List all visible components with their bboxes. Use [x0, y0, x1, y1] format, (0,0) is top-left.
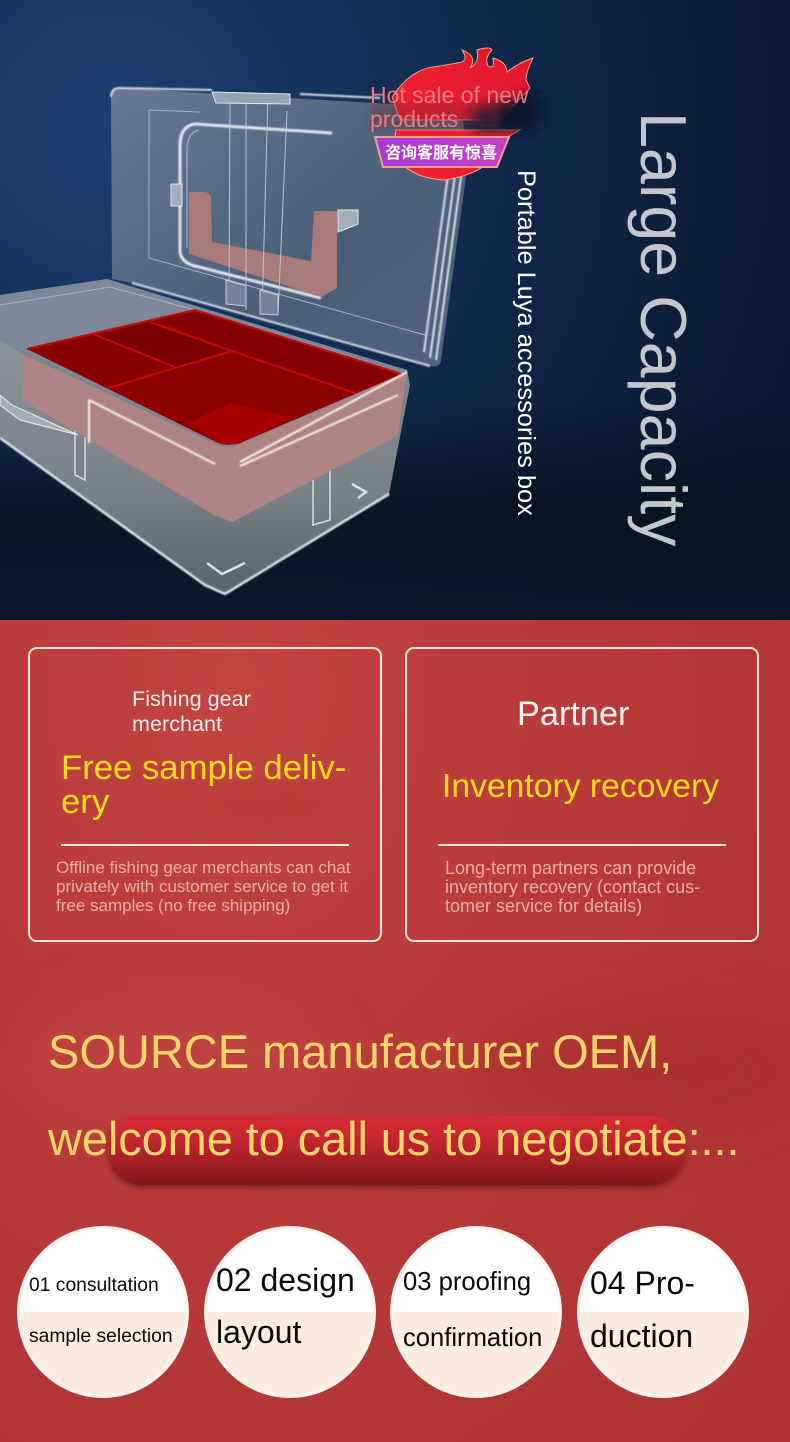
step 02 [204, 1226, 376, 1398]
product illustration: transparent box with red tray [0, 0, 790, 596]
step 04 detail: duction [590, 1318, 693, 1354]
card description [56, 858, 351, 915]
card offer: Inventory recovery [442, 767, 719, 805]
panel: red background [0, 620, 790, 1442]
card offer: ery [61, 783, 109, 821]
step 01 detail: sample selection [29, 1326, 173, 1347]
card heading: Fishing gear [132, 686, 251, 711]
step 01 label: 01 consultation [29, 1275, 159, 1296]
pink band [23, 354, 407, 522]
OEM heading [48, 1025, 739, 1165]
OEM heading: SOURCE manufacturer OEM, [48, 1025, 672, 1078]
step 04 label: 04 Pro- [590, 1265, 695, 1301]
card offer [61, 749, 346, 821]
card rule [438, 844, 726, 846]
card offer: Free sample deliv- [61, 749, 346, 787]
card description: free samples (no free shipping) [56, 896, 290, 915]
decorative pill behind heading [108, 1116, 685, 1185]
panel: product hero [0, 0, 790, 620]
red textured glow [524, 1044, 622, 1088]
hot sale badge [370, 48, 540, 180]
red tray [27, 310, 402, 445]
step 02 label: 02 design [216, 1262, 355, 1298]
panel: fishing gear merchant card [28, 647, 382, 942]
card heading: Partner [517, 695, 629, 733]
step 03 [390, 1226, 562, 1398]
step 04 [577, 1226, 749, 1398]
card description: Long-term partners can provide [445, 858, 696, 878]
card rule [61, 844, 349, 846]
card description [445, 858, 700, 916]
panel: partner card [405, 647, 759, 942]
step 02 detail: layout [216, 1314, 301, 1350]
vertical divider [575, 155, 577, 545]
vertical subtitle: Portable Luya accessories box [512, 170, 540, 516]
card description: inventory recovery (contact cus- [445, 877, 700, 897]
vertical title: Large Capacity [627, 112, 699, 546]
badge label: 咨询客服有惊喜 [385, 145, 497, 162]
card heading [132, 686, 251, 736]
card heading: merchant [132, 711, 222, 736]
card description: tomer service for details) [445, 896, 642, 916]
box base [0, 279, 410, 594]
card description: Offline fishing gear merchants can chat [56, 858, 351, 877]
OEM heading: welcome to call us to negotiate:... [48, 1112, 739, 1165]
box lid [111, 88, 467, 366]
card description: privately with customer service to get it [56, 877, 348, 896]
step 03 label: 03 proofing [403, 1268, 531, 1296]
badge text: hot sale: Hot sale of new products [370, 82, 529, 132]
step 01 [17, 1226, 189, 1398]
step 03 detail: confirmation [403, 1324, 542, 1352]
